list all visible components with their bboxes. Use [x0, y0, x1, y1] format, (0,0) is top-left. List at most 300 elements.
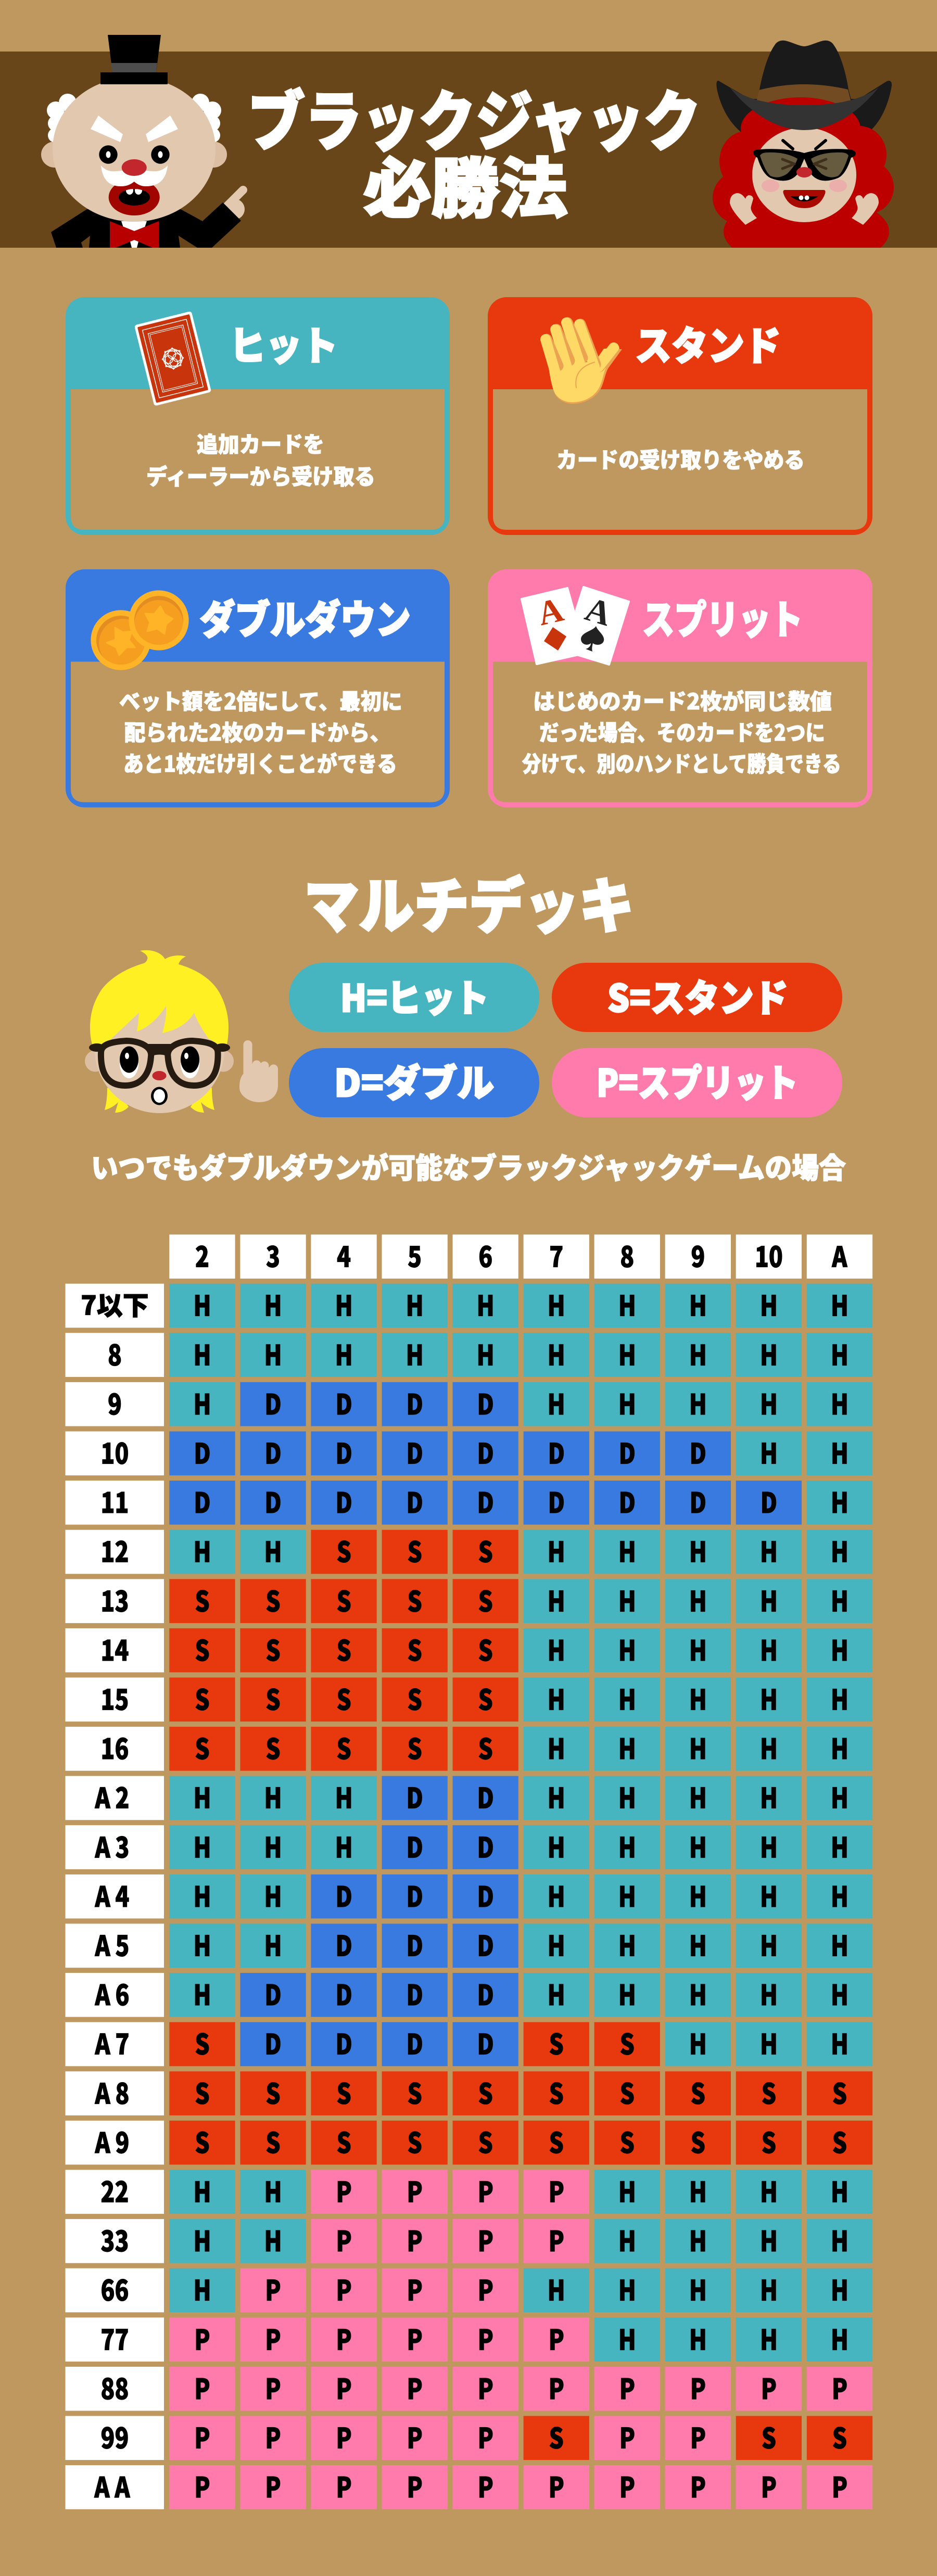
stand panel body — [493, 389, 867, 530]
clown eyes — [99, 145, 170, 164]
row: 88: P — [477, 2367, 493, 2407]
row: 14 — [66, 1628, 872, 1673]
row: 88: P — [407, 2367, 423, 2407]
row: 22: P — [548, 2170, 564, 2211]
row: 13: H — [548, 1579, 565, 1620]
row: 14: S — [336, 1629, 351, 1669]
row: 16: S — [336, 1727, 351, 1768]
row: 15: S — [265, 1678, 281, 1718]
row: A9: S — [195, 2121, 210, 2161]
row: 22 — [66, 2170, 872, 2214]
row: A4: H — [264, 1875, 282, 1915]
row: 11: 11 — [101, 1481, 129, 1522]
row: A4: H — [193, 1875, 211, 1915]
row: A5: H — [618, 1924, 636, 1965]
row: 14: H — [760, 1629, 778, 1669]
row: A8: S — [832, 2072, 847, 2112]
row: A6: H — [193, 1973, 211, 2014]
row: 11: D — [548, 1481, 565, 1522]
row: 7 or less: H — [193, 1284, 211, 1324]
row: 16: S — [407, 1727, 422, 1768]
row: 16: 16 — [101, 1727, 129, 1768]
row: 10: D — [194, 1432, 211, 1472]
row: 13: S — [336, 1579, 351, 1620]
row: 8: H — [193, 1333, 211, 1374]
legend: D = double — [289, 1048, 539, 1117]
row: 16: H — [760, 1727, 778, 1768]
row: 33: P — [407, 2220, 423, 2260]
row: 99: P — [407, 2416, 423, 2457]
row: 99: S — [832, 2416, 847, 2457]
header row: dealer card: 2 — [195, 1235, 209, 1276]
row: 8: H — [689, 1333, 707, 1374]
row: 7 or less: H — [477, 1284, 495, 1324]
row: 33 — [66, 2219, 872, 2263]
row: A2: H — [831, 1776, 849, 1817]
split panel body — [493, 662, 867, 802]
hat crown — [759, 41, 851, 99]
row: 9: H — [831, 1383, 849, 1423]
row: 33: P — [548, 2220, 564, 2260]
row: A3: H — [548, 1826, 565, 1866]
boy mouth — [151, 1087, 168, 1105]
row: 10: H — [831, 1432, 849, 1472]
row: 9: 9 — [108, 1383, 122, 1423]
row: 10: D — [335, 1432, 352, 1472]
boy nose — [152, 1071, 167, 1080]
row: A9: S — [549, 2121, 564, 2161]
row: A3: H — [335, 1826, 353, 1866]
header row: dealer card: 7 — [549, 1235, 563, 1276]
row: A2 — [66, 1776, 872, 1820]
row: 12: S — [336, 1530, 351, 1571]
row: A3: H — [689, 1826, 707, 1866]
row: 9: H — [760, 1383, 778, 1423]
row: 7 or less: H — [831, 1284, 849, 1324]
row: AA: AA — [94, 2466, 135, 2506]
row: 22: H — [831, 2170, 849, 2211]
row: 11: D — [690, 1481, 706, 1522]
row: 14: H — [548, 1629, 565, 1669]
woman nose — [796, 167, 812, 177]
row: 12: 12 — [101, 1530, 129, 1571]
row: 99: P — [619, 2416, 635, 2457]
row: 22: H — [618, 2170, 636, 2211]
row: 15: H — [760, 1678, 778, 1718]
boy eyes — [120, 1046, 199, 1078]
row: 10: D — [548, 1432, 565, 1472]
row: A5: H — [689, 1924, 707, 1965]
row: A5: H — [760, 1924, 778, 1965]
row: 33: 33 — [101, 2220, 129, 2260]
red hair — [713, 97, 894, 248]
row: 66: P — [477, 2268, 493, 2309]
row: A9 — [66, 2121, 872, 2165]
row: 7 or less — [66, 1284, 872, 1328]
row: AA: P — [336, 2466, 352, 2506]
title line 1: ブラックジャック — [248, 69, 701, 163]
row: 14: H — [831, 1629, 849, 1669]
row: A6: D — [335, 1973, 352, 2014]
row: 88: 88 — [101, 2367, 129, 2407]
row: 8: H — [760, 1333, 778, 1374]
row: A7: S — [620, 2022, 635, 2063]
row: 77: P — [407, 2318, 423, 2358]
row: A9: S — [832, 2121, 847, 2161]
row: 11: D — [761, 1481, 777, 1522]
row: A3: H — [760, 1826, 778, 1866]
row: 66: H — [548, 2268, 565, 2309]
row: 77: 77 — [101, 2318, 129, 2358]
row: 7 or less: H — [264, 1284, 282, 1324]
row: 12: H — [193, 1530, 211, 1571]
row: 77: P — [477, 2318, 493, 2358]
row: 7 or less: 7以下 — [81, 1285, 149, 1323]
row: A2: H — [618, 1776, 636, 1817]
clown shirt and bow tie — [110, 221, 159, 248]
row: 9: H — [193, 1383, 211, 1423]
boy hand pointing up — [239, 1040, 278, 1102]
strategy table — [66, 1234, 872, 2509]
split heading: スプリット — [642, 588, 803, 645]
row: 15: H — [831, 1678, 849, 1718]
clown hair — [47, 94, 221, 143]
row: A5: H — [831, 1924, 849, 1965]
header row: dealer card: 6 — [478, 1235, 492, 1276]
row: A7: H — [831, 2022, 849, 2063]
row: 77: P — [265, 2318, 281, 2358]
row: 16: H — [831, 1727, 849, 1768]
header row: dealer card: 8 — [620, 1235, 634, 1276]
row: A7: D — [477, 2022, 494, 2063]
row: AA: P — [477, 2466, 493, 2506]
woman brows — [783, 141, 826, 149]
row: 13: S — [407, 1579, 422, 1620]
row: A9: S — [691, 2121, 705, 2161]
row: 99: 99 — [101, 2416, 129, 2457]
double description: あと1枚だけ引くことができる — [123, 747, 397, 779]
row: 9: D — [477, 1383, 494, 1423]
row: A2: H — [548, 1776, 565, 1817]
row: A4: H — [689, 1875, 707, 1915]
row: 15 — [66, 1678, 872, 1721]
row: 99: S — [762, 2416, 776, 2457]
split description: 分けて、別のハンドとして勝負できる — [522, 747, 841, 779]
row: 16: H — [548, 1727, 565, 1768]
row: 15: S — [195, 1678, 210, 1718]
hit description: 追加カードを — [197, 427, 324, 459]
row: 9: H — [548, 1383, 565, 1423]
icon: raised hand — [546, 323, 622, 404]
row: 77 — [66, 2317, 872, 2362]
row: 8: H — [831, 1333, 849, 1374]
stand heading: スタンド — [635, 314, 781, 372]
row: 11: H — [831, 1481, 849, 1522]
row: 7 or less: H — [618, 1284, 636, 1324]
row: 9: D — [264, 1383, 282, 1423]
row: 88 — [66, 2367, 872, 2411]
row: 8: H — [264, 1333, 282, 1374]
row: 13 — [66, 1579, 872, 1623]
row: 33: H — [760, 2220, 778, 2260]
row: A8: S — [407, 2072, 422, 2112]
hit description — [146, 427, 375, 491]
row: 16: S — [478, 1727, 493, 1768]
row: 7 or less: H — [689, 1284, 707, 1324]
row: 13: S — [265, 1579, 281, 1620]
row: 13: S — [195, 1579, 210, 1620]
clown head — [53, 77, 216, 222]
row: A5: H — [548, 1924, 565, 1965]
row: A6: H — [831, 1973, 849, 2014]
double description — [119, 684, 402, 779]
row: 8: 8 — [108, 1333, 122, 1374]
row: 15: H — [689, 1678, 707, 1718]
row: 66: H — [831, 2268, 849, 2309]
row: 88: P — [336, 2367, 352, 2407]
icon: two aces: A — [534, 591, 567, 633]
hit panel background — [66, 297, 450, 535]
header row: dealer card: 9 — [691, 1235, 705, 1276]
row: 16: H — [689, 1727, 707, 1768]
row: 15: S — [478, 1678, 493, 1718]
row: 88: P — [690, 2367, 706, 2407]
row: A8: S — [265, 2072, 281, 2112]
row: A3: H — [618, 1826, 636, 1866]
row: 12: H — [760, 1530, 778, 1571]
header row: dealer card — [169, 1234, 872, 1279]
row: A3: A3 — [95, 1826, 134, 1866]
row: A5: H — [264, 1924, 282, 1965]
row: A7: H — [760, 2022, 778, 2063]
row: 10: D — [477, 1432, 494, 1472]
clown brows — [91, 116, 178, 142]
row: A3: H — [193, 1826, 211, 1866]
row: 13: H — [618, 1579, 636, 1620]
row: 15: H — [618, 1678, 636, 1718]
row: 15: S — [336, 1678, 351, 1718]
clown nose — [122, 159, 147, 176]
row: 22: H — [264, 2170, 282, 2211]
double panel body — [71, 662, 445, 802]
row: 16 — [66, 1727, 872, 1771]
row: 33: H — [193, 2220, 211, 2260]
row: 14: S — [195, 1629, 210, 1669]
row: 16: S — [195, 1727, 210, 1768]
row: 13: 13 — [101, 1579, 129, 1620]
row: A9: S — [478, 2121, 493, 2161]
row: 33: P — [477, 2220, 493, 2260]
row: A4: D — [477, 1875, 494, 1915]
row: 11: D — [477, 1481, 494, 1522]
row: 66: H — [618, 2268, 636, 2309]
panel: stand — [488, 297, 872, 535]
header row: dealer card: 5 — [408, 1235, 422, 1276]
row: A8: S — [762, 2072, 776, 2112]
row: A5 — [66, 1923, 872, 1968]
row: 15: H — [548, 1678, 565, 1718]
row: A9: S — [620, 2121, 635, 2161]
row: 8: H — [406, 1333, 424, 1374]
row: 12: H — [548, 1530, 565, 1571]
double heading: ダブルダウン — [200, 588, 411, 645]
row: 88: P — [761, 2367, 777, 2407]
row: 12 — [66, 1530, 872, 1574]
clown body — [51, 202, 241, 248]
row: 77: H — [618, 2318, 636, 2358]
row: A4: H — [831, 1875, 849, 1915]
woman cheeks — [762, 180, 847, 192]
row: A7: D — [335, 2022, 352, 2063]
row: 14: H — [689, 1629, 707, 1669]
row: A7 — [66, 2022, 872, 2066]
row: 10: H — [760, 1432, 778, 1472]
character: red-haired woman with cowboy hat — [713, 41, 894, 268]
double description: 配られた2枚のカードから、 — [124, 716, 391, 747]
hit panel body — [71, 389, 445, 530]
row: A5: A5 — [95, 1924, 134, 1965]
row: A2: H — [264, 1776, 282, 1817]
row: 7 or less: H — [760, 1284, 778, 1324]
legend: S = stand — [552, 963, 842, 1032]
clown moustache — [101, 165, 168, 186]
row: 88: P — [194, 2367, 210, 2407]
row: 8: H — [548, 1333, 565, 1374]
row: A2: D — [406, 1776, 423, 1817]
row: 11: D — [335, 1481, 352, 1522]
legend: P = split — [552, 1048, 842, 1117]
row: 11: D — [619, 1481, 636, 1522]
row: AA: P — [761, 2466, 777, 2506]
row: 99 — [66, 2416, 872, 2460]
row: A4: D — [406, 1875, 423, 1915]
row: 10: 10 — [101, 1432, 129, 1472]
row: A6: D — [264, 1973, 282, 2014]
hat back brim — [716, 81, 892, 133]
row: A7: H — [689, 2022, 707, 2063]
row: A4: D — [335, 1875, 352, 1915]
row: 88: P — [832, 2367, 847, 2407]
row: A2: D — [477, 1776, 494, 1817]
row: 12: S — [407, 1530, 422, 1571]
split description: だった場合、そのカードを2つに — [539, 716, 825, 747]
row: 15: S — [407, 1678, 422, 1718]
row: 66: P — [265, 2268, 281, 2309]
row: 7 or less: H — [548, 1284, 565, 1324]
boy glasses — [89, 1041, 230, 1086]
row: A2: H — [689, 1776, 707, 1817]
split description: はじめのカード2枚が同じ数値 — [533, 684, 832, 716]
row: 16: S — [265, 1727, 281, 1768]
row: 33: H — [264, 2220, 282, 2260]
row: 7 or less: H — [335, 1284, 353, 1324]
row: A7: D — [264, 2022, 282, 2063]
row: A3: D — [477, 1826, 494, 1866]
row: 10 — [66, 1431, 872, 1475]
row: 66: P — [336, 2268, 352, 2309]
row: 13: S — [478, 1579, 493, 1620]
row: A8: S — [336, 2072, 351, 2112]
row: 14: S — [478, 1629, 493, 1669]
row: 22: H — [760, 2170, 778, 2211]
row: 77: P — [548, 2318, 564, 2358]
row: 22: P — [477, 2170, 493, 2211]
double panel background — [66, 569, 450, 808]
split panel background — [488, 569, 872, 808]
row: A8: S — [478, 2072, 493, 2112]
row: A6: D — [477, 1973, 494, 2014]
header row: dealer card: 4 — [337, 1235, 351, 1276]
row: 99: P — [265, 2416, 281, 2457]
row: A9: S — [336, 2121, 351, 2161]
row: A7: S — [549, 2022, 564, 2063]
row: 13: H — [760, 1579, 778, 1620]
row: A3 — [66, 1825, 872, 1869]
hat front brim — [730, 87, 879, 130]
row: 33: H — [689, 2220, 707, 2260]
row: AA: P — [194, 2466, 210, 2506]
row: 33: H — [618, 2220, 636, 2260]
row: AA: P — [832, 2466, 847, 2506]
woman face — [752, 127, 856, 222]
row: 66: H — [760, 2268, 778, 2309]
row: 11 — [66, 1481, 872, 1525]
row: A5: D — [477, 1924, 494, 1965]
row: 33: H — [831, 2220, 849, 2260]
row: 14: S — [407, 1629, 422, 1669]
row: AA: P — [690, 2466, 706, 2506]
row: 77: P — [336, 2318, 352, 2358]
header row: dealer card: 10 — [755, 1235, 783, 1276]
row: 8 — [66, 1333, 872, 1377]
header row: dealer card: A — [831, 1235, 847, 1276]
row: A5: D — [335, 1924, 352, 1965]
row: AA: P — [548, 2466, 564, 2506]
row: 66 — [66, 2268, 872, 2312]
row: 15: 15 — [101, 1678, 129, 1718]
stand description: カードの受け取りをやめる — [556, 443, 805, 475]
row: 99: S — [549, 2416, 564, 2457]
row: 14: 14 — [101, 1629, 129, 1669]
row: 8: H — [618, 1333, 636, 1374]
row: A8 — [66, 2071, 872, 2115]
row: 13: H — [689, 1579, 707, 1620]
row: 88: P — [619, 2367, 635, 2407]
row: 12: H — [831, 1530, 849, 1571]
row: A2: A2 — [95, 1776, 134, 1817]
row: 22: 22 — [101, 2170, 129, 2211]
row: A6: A6 — [95, 1973, 134, 2014]
icon: two aces — [522, 587, 629, 665]
title band — [0, 52, 937, 248]
woman mouth — [783, 190, 826, 208]
row: A8: A8 — [95, 2072, 134, 2112]
panel: hit — [66, 297, 450, 535]
row: A6: H — [760, 1973, 778, 2014]
row: AA: P — [619, 2466, 635, 2506]
subtitle: いつでもダブルダウンが可能なブラックジャックゲームの場合 — [91, 1145, 846, 1187]
row: 9: H — [689, 1383, 707, 1423]
row: 12: S — [478, 1530, 493, 1571]
row: 14: H — [618, 1629, 636, 1669]
row: A7: D — [406, 2022, 423, 2063]
row: 99: P — [477, 2416, 493, 2457]
row: 12: H — [264, 1530, 282, 1571]
title text — [248, 69, 701, 231]
row: A6: D — [406, 1973, 423, 2014]
row: AA: P — [407, 2466, 423, 2506]
row: 77: H — [689, 2318, 707, 2358]
